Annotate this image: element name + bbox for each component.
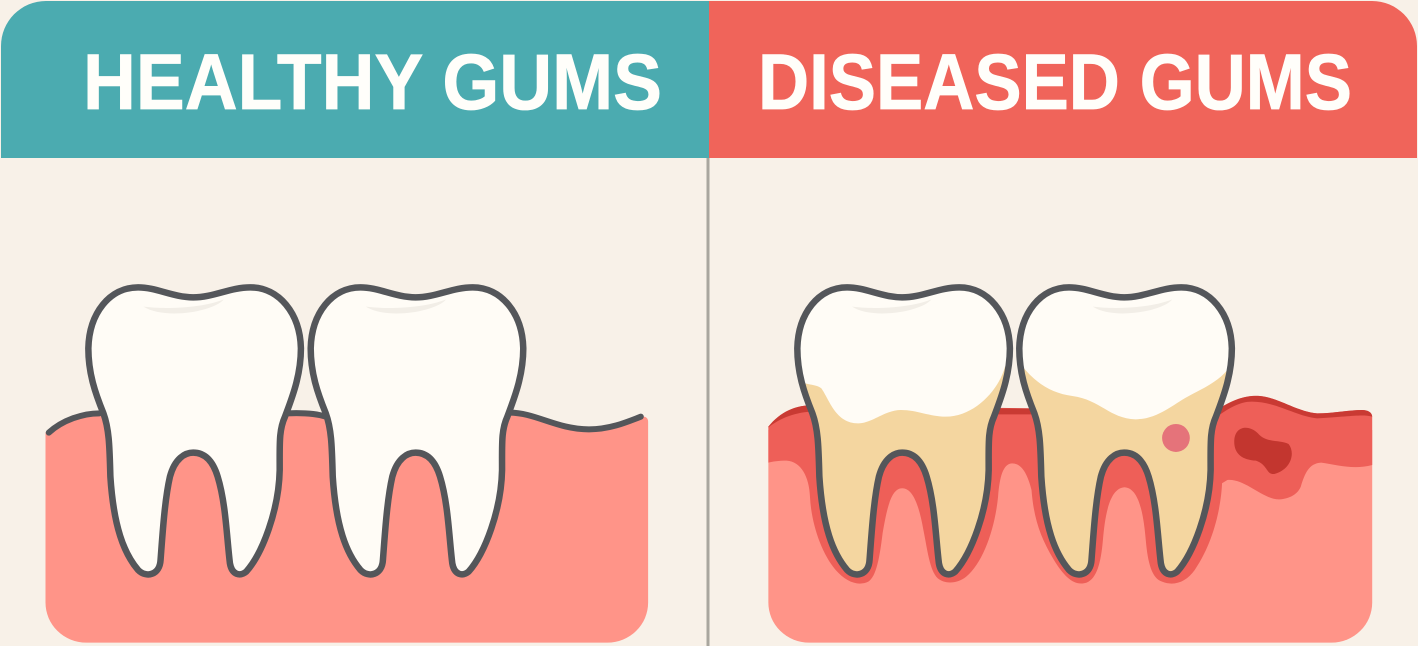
panel: healthy gums illustration xyxy=(46,287,648,643)
healthy tooth left xyxy=(88,287,301,574)
divider between panels xyxy=(706,158,710,646)
header: diseased gums xyxy=(709,1,1417,158)
title: diseased gums: DISEASED GUMS xyxy=(758,37,1352,126)
title: healthy gums: HEALTHY GUMS xyxy=(83,37,662,126)
header: healthy gums xyxy=(1,1,709,158)
diseased tooth left xyxy=(791,280,1019,574)
diseased tooth right xyxy=(1011,280,1240,574)
diseased gum base tissue xyxy=(768,430,1372,643)
receding gum edge xyxy=(768,396,1372,427)
tooth decay spot xyxy=(1162,424,1190,452)
healthy tooth right xyxy=(311,287,523,574)
healthy gum line xyxy=(49,413,641,433)
healthy gum tissue xyxy=(46,413,648,643)
inflamed gum band xyxy=(768,396,1372,584)
gum abscess xyxy=(1234,428,1292,474)
panel: diseased gums illustration xyxy=(768,280,1372,643)
